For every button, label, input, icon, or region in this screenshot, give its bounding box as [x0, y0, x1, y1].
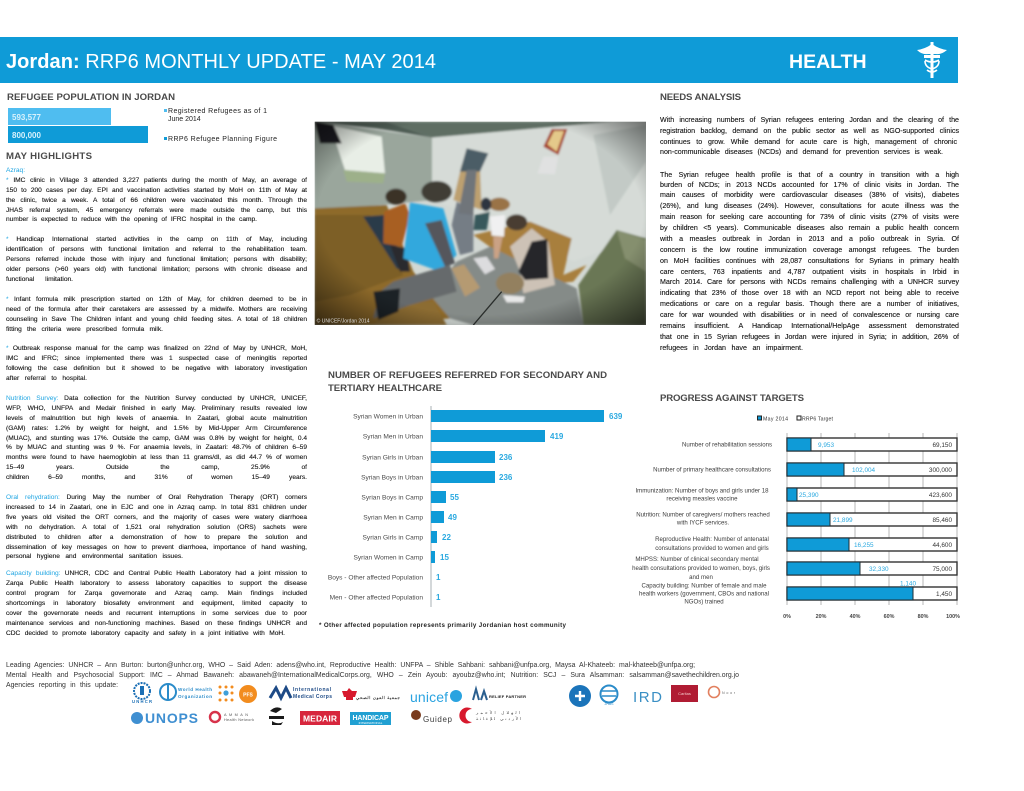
- logo: Medair: [300, 711, 340, 725]
- text block: needs analysis: (26%), and lung diseases (24%). However, consultations for acute illness was the: [660, 202, 959, 210]
- heading: progress against targets: PROGRESS AGAINST TARGETS: [660, 393, 805, 404]
- stacked bar chart: progress against targets: 102,004: [852, 467, 876, 474]
- text block: may highlights: * IMC clinic in Village 3 attended 3,227 patients during the month of May, an average of: [6, 177, 307, 184]
- text block: needs analysis: main reason for seeking care accounting for 73% of clinic visits (27% of visits were: [660, 212, 959, 220]
- text block: may highlights: shortcomings in laboratory biosafety environment and equipment, limited capacity to: [6, 600, 307, 607]
- chart legend: [758, 416, 834, 422]
- text block: needs analysis: by children <5 years). Communicable diseases also remain a public health concern: [660, 224, 959, 232]
- stacked bar chart: progress against targets: Immunization: Number of boys and girls under 18: [635, 488, 769, 494]
- heading: needs analysis: NEEDS ANALYSIS: [660, 92, 742, 103]
- text block: needs analysis: With increasing numbers of Syrian refugees entering Jordan and the clearing of the: [660, 116, 959, 124]
- stacked bar chart: progress against targets: 75,000: [932, 566, 952, 573]
- bar chart: referrals: 236: [499, 473, 513, 482]
- partner logos: [131, 683, 736, 726]
- stacked bar chart: progress against targets: Capacity building: Number of female and male: [642, 582, 767, 590]
- stacked bar chart: progress against targets: and men: [689, 574, 713, 581]
- stacked bar chart: progress against targets: 9,953: [818, 442, 834, 449]
- population legend: June 2014: [168, 116, 201, 123]
- logo: WHO: Organization: [178, 694, 212, 699]
- text block: may highlights: functional limitation.: [6, 276, 73, 282]
- text block: needs analysis: care for war wounded with disabilities or in need of convalescence or nursing care: [660, 311, 959, 319]
- text block: needs analysis: remains insufficient. A Handicap International/HelpAge assessment demonstrated: [660, 322, 959, 330]
- text block: needs analysis: care centers, 763 inpatients and 4,787 outpatient visits in hospitals in Irbid in: [660, 268, 959, 276]
- text block: may highlights: Zarqa Public Health laboratory to assess laboratory capacities to support the disease: [6, 580, 307, 587]
- title: Jordan: RRP6 MONTHLY UPDATE - MAY 2014: [6, 51, 436, 73]
- logo: red swirl partner: Health Network: [224, 718, 254, 722]
- footer contacts: Leading Agencies: UNHCR – Ann Burton: burton@unhcr.org, WHO – Said Aden: adens@who.int, Reproductive Health: UNFPA – Shible Sahbani: sahbani@unfpa.org, Maysa Al-Khateeb: mal-khateeb@unfpa.org;: [6, 662, 695, 668]
- text block: may highlights: distributed to children after a demonstration of how to prepare the solution and: [6, 534, 307, 540]
- stacked bar chart: progress against targets: with IYCF services.: [676, 520, 729, 526]
- header banner: [0, 37, 958, 83]
- stacked bar chart: progress against targets: 21,899: [833, 517, 853, 524]
- bar chart: referrals: Syrian Boys in Urban: [361, 474, 423, 482]
- logo: UNICEF: unicef: [410, 689, 448, 705]
- text block: may highlights: * Infant formula milk prescription started on 12th of May, for children deemed to be in: [6, 296, 307, 303]
- text block: needs analysis: indicating that 23% of those over 18 with an NCD report not being able to receive: [660, 289, 959, 297]
- logo: International Medical Corps: [270, 687, 332, 700]
- text block: may highlights: Oral rehydration: During May the number of Oral Rehydration Therapy (ORT) corners: [6, 494, 307, 501]
- text block: needs analysis: concern is the low routine immunization coverage amongst refugees. The burden: [660, 246, 959, 254]
- logo: Handicap International: HANDICAP: [352, 715, 389, 722]
- logo: orange ring: [708, 686, 736, 698]
- bar chart: referrals: Boys - Other affected Population: [328, 574, 423, 582]
- footer contacts: [6, 662, 739, 689]
- logo: red partner: [342, 688, 401, 701]
- text block: may highlights: need of the formula after their caretakers are assessed by a midwife. Mothers are receiving: [6, 306, 307, 312]
- logo: WHO: World Health: [178, 687, 212, 692]
- population legend: RRP6 Refugee Planning Figure: [168, 136, 277, 143]
- text block: may highlights: older persons (>60 years old) with functional limitation; persons with chronic disease and: [6, 266, 307, 273]
- stacked bar chart: progress against targets: 20%: [816, 614, 827, 620]
- logo: UNFPA: PFS: [243, 692, 254, 698]
- logo: Guide partner: Guidep: [423, 715, 453, 724]
- text block: may highlights: following the case definition but it showed to be negative with laboratory investigation: [6, 365, 307, 372]
- text block: needs analysis: main causes of morbidity were cardiovascular diseases (38% of visits), diabetes: [660, 191, 959, 199]
- text block: may highlights: counseling in Save The Children infant and young child feeding sites. A total of 18 children: [6, 316, 307, 322]
- logo: WHO: [160, 684, 212, 700]
- text block: needs analysis: that one in 15 Syrian refugees in Jordan were injured in Syria; in addition, 26% of: [660, 332, 959, 340]
- text block: may highlights: [6, 167, 308, 636]
- logo: blue medical circle: [569, 685, 591, 707]
- logo: UNOPS: UNOPS: [145, 710, 198, 726]
- sector label: HEALTH: [789, 51, 867, 73]
- logo: red swirl partner: [210, 712, 254, 722]
- text block: may highlights: children 6–59 months, and 31% of women 15–49 years.: [6, 474, 307, 481]
- logo: partner with figures: [473, 689, 526, 700]
- footer contacts: Mental Health and Psychosocial Support: IMC – Ahmad Bawaneh: abawaneh@InternationalMedicalCorps.org, WHO – Zein Ayoub: ayoubz@who.int; Nutrition: SCJ – Sura Alsamman: salsamman@savethechildren.org.jo: [6, 672, 739, 679]
- text block: needs analysis: registration backlog, demand on the public sector as well as NGO-supported clinics: [660, 127, 959, 135]
- stacked bar chart: progress against targets: health consultations provided to women, boys, girls: [632, 565, 770, 572]
- bar chart: referrals: 49: [448, 513, 457, 522]
- text block: may highlights: CDC decided to promote laboratory capacity and safety in a joint initiative with MoH.: [6, 630, 285, 636]
- stacked bar chart: progress against targets: 300,000: [929, 467, 952, 474]
- text block: may highlights: levels of malnutrition but high levels of anaemia. In Zaatari, global acute malnutrition: [6, 414, 307, 422]
- stacked bar chart: progress against targets: 40%: [850, 614, 861, 620]
- logo: red crescent: الأردني للإغاثة: [476, 715, 521, 722]
- photo: health worker measuring a child: [314, 122, 646, 325]
- stacked bar chart: progress against targets: Number of rehabilitation sessions: [682, 442, 772, 448]
- text block: may highlights: after referral to hospital.: [6, 375, 87, 382]
- text block: may highlights: the clinic, twice a week. A total of 66 children were vaccinated this month. Through the: [6, 196, 307, 204]
- population bars: 800,000: [12, 131, 41, 140]
- logo: partner with figures: RELIEF PARTNER: [489, 694, 526, 699]
- logo: International Medical Corps: Medical Corps: [293, 694, 332, 700]
- stacked bar chart: progress against targets: Reproductive Health: Number of antenatal: [655, 536, 769, 543]
- bar chart: referrals: 55: [450, 493, 459, 502]
- text block: may highlights: identification of persons with functional limitation and referral to the rehabilitation team.: [6, 246, 307, 253]
- text block: may highlights: cover the governorate needs and recurrent interruptions in some services due to poor: [6, 610, 307, 617]
- stacked bar chart: progress against targets: health workers (government, CBOs and national: [639, 590, 769, 598]
- chart footnote: * Other affected population represents primarily Jordanian host community: [319, 622, 567, 629]
- text block: may highlights: maintenance services and non-functioning machines. Based on these findings UNHCR and: [6, 620, 307, 626]
- logo: Handicap International: INTERNATIONAL: [359, 721, 383, 725]
- bar chart: referrals: Syrian Men in Camp: [363, 514, 423, 522]
- bar chart: referrals: 15: [440, 553, 449, 562]
- logo: orange ring: Noor: [722, 691, 736, 695]
- text block: needs analysis: continues to grow. While demand for acute care is high, management of chronic: [660, 138, 957, 146]
- text block: may highlights: (MUAC), and stunting was 17%. Outside the camp, GAM was 0.8% by weight for height, 0.4: [6, 434, 307, 442]
- population legend: [164, 108, 277, 143]
- stacked bar chart: progress against targets: 16,255: [854, 542, 874, 549]
- chart legend: May 2014: [763, 416, 788, 422]
- bar chart: referrals: 1: [436, 593, 441, 602]
- logo: red swirl partner: AMMAN: [224, 713, 248, 717]
- stacked bar chart: progress against targets: 44,600: [932, 542, 952, 549]
- stacked bar chart: progress against targets: consultations provided to women and girls: [655, 545, 769, 552]
- logo: UNFPA: [218, 685, 257, 703]
- stacked bar chart: progress against targets: 1,450: [936, 591, 952, 598]
- bar chart: referrals: 22: [442, 533, 451, 542]
- text block: needs analysis: [660, 116, 960, 352]
- logo: UNHCR: [132, 683, 152, 704]
- text block: may highlights: JHAS referral system, 45 emergency referrals were made outside the camp, but this: [6, 206, 307, 214]
- logo: blue globe: JHAS: [605, 702, 614, 706]
- text block: may highlights: dissemination of key messages on how to prevent diarrhoea, importance of hand washing,: [6, 544, 307, 550]
- stacked bar chart: progress against targets: 1,140: [900, 580, 916, 588]
- text block: needs analysis: The Syrian refugee health profile is that of a country in transition with a high: [660, 170, 959, 178]
- text block: may highlights: personal hygiene and environmental sanitation issues.: [6, 553, 183, 560]
- bar chart: referrals: Syrian Girls in Urban: [362, 454, 423, 462]
- text block: may highlights: Capacity building: UNHCR, CDC and Central Public Health Laboratory had a joint mission to: [6, 570, 307, 577]
- bar chart: referrals: Syrian Men in Urban: [363, 434, 423, 440]
- stacked bar chart: progress against targets: 69,150: [932, 442, 952, 449]
- logo: IRD: IRD: [633, 689, 662, 706]
- logo: red crescent: الهلال الأحمر: [475, 709, 520, 715]
- logo: blue globe: [600, 686, 618, 706]
- logo: Guide partner: [411, 710, 453, 724]
- text block: may highlights: IMC and IFRC; since implemented there was 1 suspected case of meningitis reported: [6, 355, 307, 362]
- text block: may highlights: * Handicap International started activities in the camp on 11th of May, including: [6, 236, 307, 243]
- stacked bar chart: progress against targets: NGOs) trained: [684, 598, 724, 606]
- text block: may highlights: with no dehydration. A total of 1,521 oral rehydration solution (ORS) sachets were: [6, 524, 307, 530]
- logo: UNHCR: UNHCR: [132, 699, 152, 704]
- stacked bar chart: progress against targets: 100%: [946, 614, 960, 620]
- text block: may highlights: number is expected to reduce with the opening of IFRC hospital in the camp.: [6, 216, 257, 223]
- stacked bar chart: progress against targets: Nutrition: Number of caregivers/ mothers reached: [636, 512, 770, 518]
- text block: may highlights: Nutrition Survey: Data collection for the Nutrition Survey conducted by UNHCR, UNICEF,: [6, 394, 307, 402]
- text block: needs analysis: on MoH facilities continues with 28,087 consultations for Syrians in primary health: [660, 257, 959, 265]
- population legend: Registered Refugees as of 1: [168, 108, 267, 115]
- stacked bar chart: progress against targets: 85,460: [932, 517, 952, 524]
- stacked bar chart: progress against targets: [632, 433, 960, 620]
- text block: may highlights: five years old visited the ORT corners, and the majority of cases were watery diarrhoea: [6, 514, 307, 520]
- population bars: 593,577: [12, 113, 41, 122]
- stacked bar chart: progress against targets: Number of primary healthcare consultations: [653, 466, 771, 474]
- logo: International Medical Corps: International: [293, 687, 332, 693]
- text block: may highlights: WFP, WHO, UNFPA and Medair finished in early May. Preliminary results revealed low: [6, 404, 307, 412]
- stacked bar chart: progress against targets: receiving measles vaccine: [666, 496, 738, 502]
- text block: may highlights: Persons referred include those with injury and functional limitation; persons with disability;: [6, 256, 307, 263]
- logo: black mark: [269, 707, 284, 725]
- stacked bar chart: progress against targets: 25,390: [799, 492, 819, 499]
- bar chart: referrals: Syrian Women in Urban: [353, 414, 423, 420]
- photo credit: © UNICEF/Jordan 2014: [317, 318, 370, 325]
- logo: red panel: [671, 685, 698, 702]
- logo: red partner: جمعية العون الصحي: [356, 695, 401, 701]
- logo: Medair: MEDAIR: [303, 714, 337, 724]
- heading: refugee population: REFUGEE POPULATION IN JORDAN: [7, 92, 175, 103]
- bar chart: referrals: 236: [499, 453, 513, 462]
- text block: needs analysis: with a measles outbreak in Jordan in 2013 and a polio outbreak in Syria. Of: [660, 235, 959, 243]
- text block: may highlights: increased to 14 in Zaatari, one in EJC and one in Azraq camp. In total 831 children under: [6, 504, 307, 510]
- bar chart: referrals: 419: [550, 432, 564, 441]
- logo: red crescent: [459, 708, 521, 724]
- heading: referrals chart: [328, 370, 607, 394]
- text block: needs analysis: medications or care on a regular basis. Though there are a number of initiatives,: [660, 300, 959, 308]
- text block: may highlights: control program for Zarqa governorate and Azraq camp. Main findings included: [6, 590, 307, 597]
- heading: referrals chart: TERTIARY HEALTHCARE: [328, 383, 443, 394]
- heading: may highlights: MAY HIGHLIGHTS: [6, 151, 93, 162]
- stacked bar chart: progress against targets: 32,330: [869, 566, 889, 573]
- bar chart: referrals: Men - Other affected Population: [330, 594, 423, 602]
- stacked bar chart: progress against targets: 60%: [884, 614, 895, 620]
- bar chart: referrals: [328, 406, 623, 607]
- population bars: [8, 108, 148, 143]
- text block: may highlights: 150 to 200 cases per day. EPI and vaccination activities started by MoH on 11th of May at: [6, 186, 307, 194]
- logo: red panel: Caritas: [678, 691, 691, 696]
- bar chart: referrals: Syrian Boys in Camp: [361, 494, 423, 502]
- logo: Handicap International: [350, 712, 391, 725]
- text block: needs analysis: non-communicable diseases (NCDs) and demand for prevention services is weak.: [660, 148, 943, 156]
- text block: may highlights: % by MUAC and stunting was 9 %. For anaemia levels, in Zaatari: 48.7% of children 6–59: [6, 444, 307, 451]
- text block: may highlights: fitting the criteria were prescribed formula milk.: [6, 326, 163, 332]
- bar chart: referrals: Syrian Women in Camp: [353, 554, 423, 562]
- text block: may highlights: Azraq:: [6, 167, 25, 174]
- text block: may highlights: (GAM) rates: 1.2% by weight for height, and 1.5% by Mid-Upper Arm Circumference: [6, 424, 307, 432]
- text block: may highlights: * Outbreak response manual for the camp was finalized on 22nd of May by UNHCR, MoH,: [6, 345, 307, 352]
- text block: may highlights: months were found to have haemoglobin at less than 11 grams/dl, as did 44.7 % of women: [6, 454, 307, 461]
- bar chart: referrals: 639: [609, 412, 623, 421]
- stacked bar chart: progress against targets: 423,600: [929, 492, 952, 499]
- text block: may highlights: 15–49 years. Outside the camp, 25.9% of: [6, 464, 307, 471]
- footer contacts: Agencies reporting in this update:: [6, 682, 118, 689]
- icon: caduceus: [917, 42, 947, 78]
- bar chart: referrals: 1: [436, 573, 441, 582]
- bar chart: referrals: Syrian Girls in Camp: [363, 534, 423, 542]
- text block: needs analysis: March 2014. Care for persons with NCDs remains challenging with a UNHCR survey: [660, 278, 959, 286]
- stacked bar chart: progress against targets: MHPSS: Number of clinical secondary mental: [635, 556, 759, 563]
- stacked bar chart: progress against targets: 80%: [918, 614, 929, 620]
- text block: needs analysis: burden of NCDs; in 2013 NCDs accounted for 17% of clinic visits in Jordan. The: [660, 180, 959, 188]
- heading: referrals chart: NUMBER OF REFUGEES REFERRED FOR SECONDARY AND: [328, 370, 607, 381]
- chart legend: RRP6 Target: [802, 416, 834, 422]
- stacked bar chart: progress against targets: 0%: [783, 614, 791, 620]
- text block: needs analysis: refugees in Jordan have an impairment.: [660, 344, 803, 352]
